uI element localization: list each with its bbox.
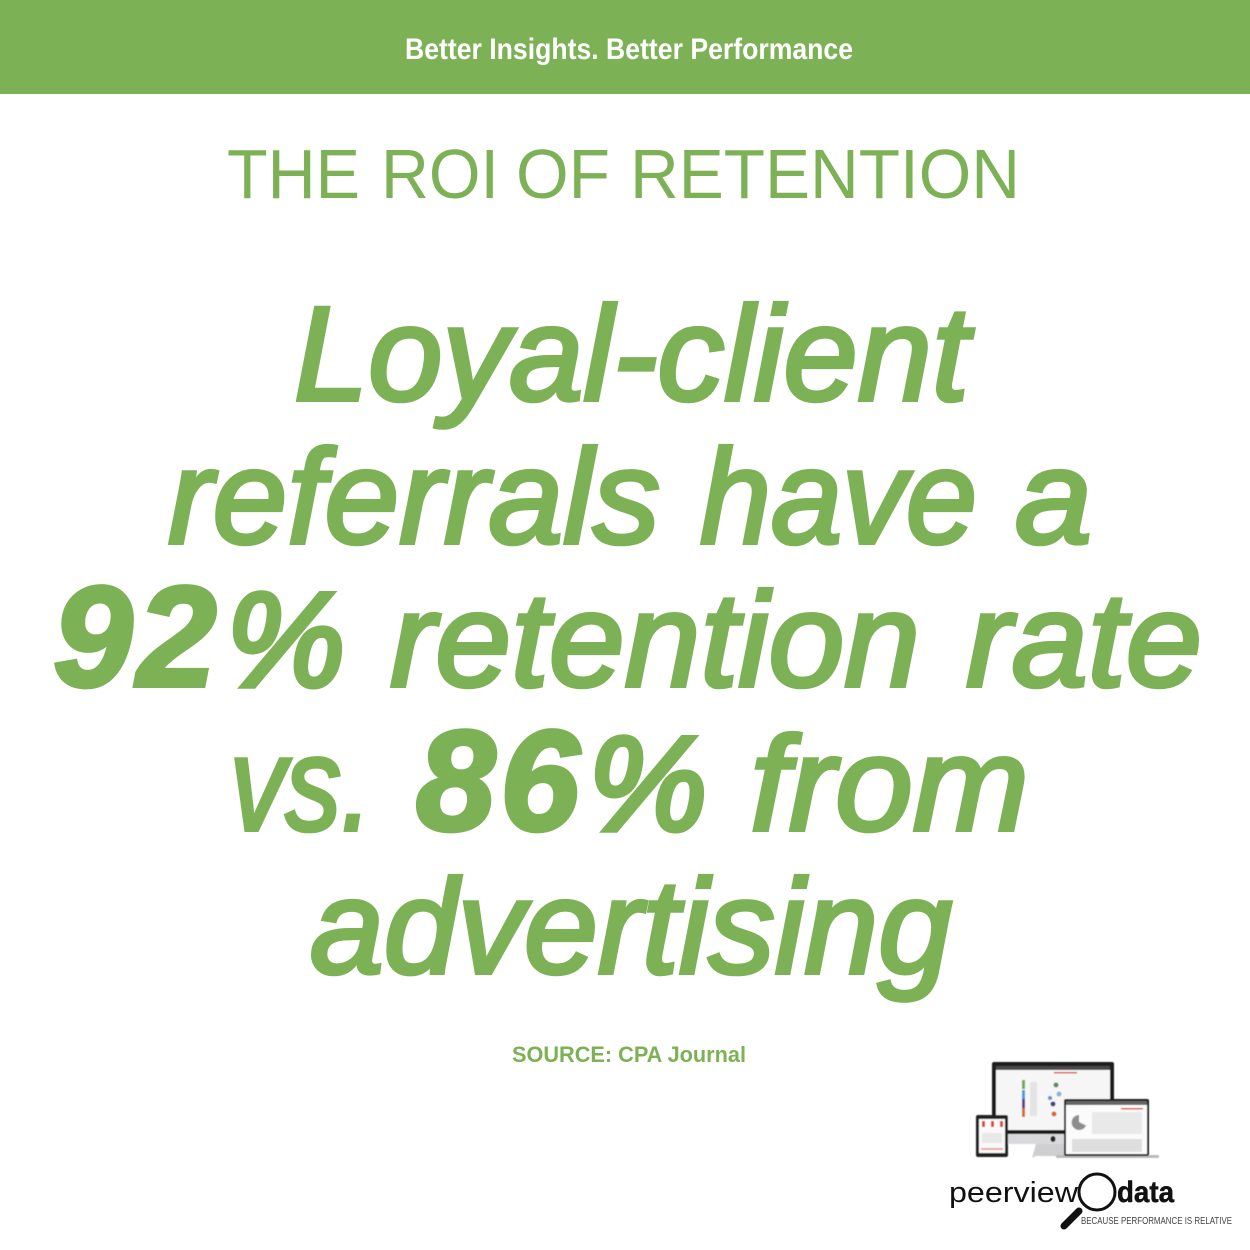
main statement: %	[588, 710, 707, 859]
icon: desktop monitor	[992, 1062, 1114, 1158]
title: THE	[227, 135, 360, 213]
header banner	[0, 0, 1250, 94]
main statement: 2	[134, 558, 217, 717]
logo: device mockups	[976, 1062, 1159, 1158]
logo: peerview data wordmark	[949, 1174, 1232, 1227]
icon: tablet	[976, 1115, 1008, 1157]
main statement: 8	[416, 702, 496, 861]
icon: laptop	[1056, 1099, 1159, 1158]
main statement	[53, 280, 1202, 1002]
main statement: from	[750, 710, 1029, 859]
main statement: 9	[53, 558, 133, 717]
main statement: vs.	[230, 710, 372, 859]
source line: SOURCE: CPA Journal	[512, 1042, 746, 1067]
main statement: referrals	[168, 423, 660, 572]
icon: magnifying glass	[1064, 1174, 1115, 1226]
main statement: Loyal-client	[294, 280, 974, 429]
main statement: %	[226, 566, 345, 715]
title	[227, 135, 1020, 213]
main statement: have	[700, 423, 977, 572]
logo: peerview data wordmark: data	[1117, 1176, 1174, 1209]
main statement: rate	[966, 566, 1202, 715]
title: ROI	[381, 135, 499, 213]
header banner: Better Insights. Better Performance	[405, 33, 853, 66]
title: RETENTION	[630, 135, 1020, 213]
logo: peerview data wordmark: peerview	[949, 1177, 1079, 1209]
main statement: advertising	[310, 853, 952, 1002]
main statement: retention	[390, 566, 920, 715]
main statement: a	[1015, 423, 1092, 572]
title: OF	[516, 135, 610, 213]
main statement: 6	[500, 702, 581, 861]
